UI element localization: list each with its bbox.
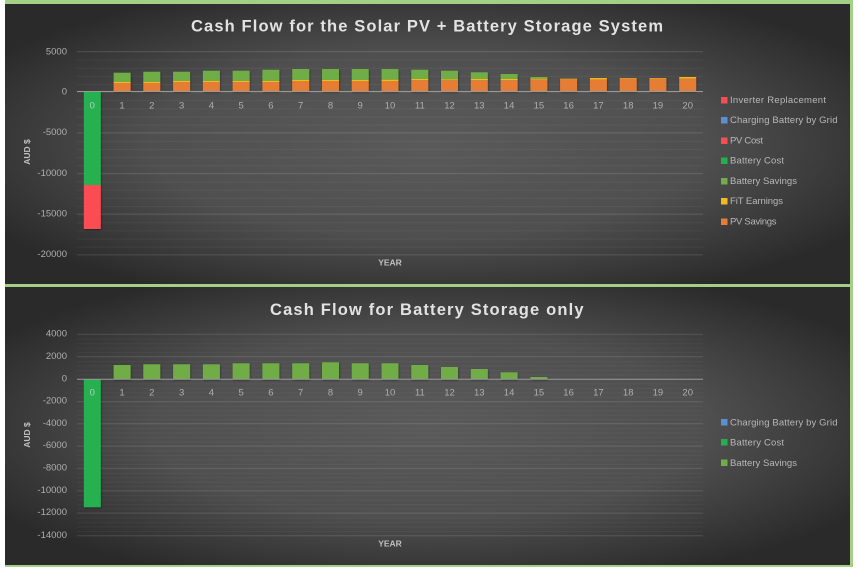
year 8 bar — [322, 69, 339, 92]
x axis labels: 18 — [623, 100, 633, 112]
title: battery storage only: Cash Flow for Battery Storage only — [270, 301, 584, 319]
year 14 bar — [501, 74, 518, 92]
x axis labels: 15 — [534, 388, 544, 398]
x axis labels: 19 — [653, 100, 663, 112]
x axis labels: 4 — [209, 100, 214, 112]
x axis labels: 7 — [298, 100, 303, 112]
year 8 bar — [322, 362, 339, 379]
x axis labels: 13 — [474, 100, 485, 112]
year 6 bar — [262, 70, 279, 92]
gridlines and y axis — [37, 328, 703, 541]
gridlines and y axis: 0 — [62, 86, 67, 98]
x axis title: YEAR — [378, 538, 402, 548]
year 5 bar — [233, 363, 250, 379]
gridlines and y axis: -5000 — [43, 127, 67, 138]
x axis labels: 5 — [238, 388, 244, 398]
panel: solar PV + battery cash flow — [5, 4, 850, 284]
x axis labels: 9 — [358, 100, 363, 112]
gridlines and y axis: -10000 — [37, 485, 67, 496]
battery bars — [84, 362, 547, 507]
year 9 bar — [352, 363, 369, 379]
x axis labels: 0 — [90, 388, 95, 398]
x axis labels: 12 — [444, 100, 455, 112]
x axis labels: 14 — [504, 388, 514, 398]
legend: solar PV + battery: FiT Earnings — [730, 196, 783, 207]
year 10 bar — [382, 69, 398, 92]
gridlines and y axis: -10000 — [37, 168, 67, 179]
legend: solar PV + battery: PV Savings — [730, 216, 777, 228]
year 13 bar — [471, 369, 488, 379]
legend: battery only: Battery Cost — [730, 438, 784, 448]
gridlines and y axis: -4000 — [43, 418, 67, 429]
x axis labels: 12 — [444, 388, 455, 398]
gridlines and y axis: -8000 — [43, 462, 67, 474]
year 19 bar — [649, 78, 666, 92]
year 14 bar — [501, 372, 518, 379]
year 5 bar — [233, 71, 250, 92]
x axis labels: 13 — [474, 388, 485, 398]
x axis labels: 8 — [328, 100, 333, 112]
x axis labels: 16 — [563, 388, 574, 398]
x axis labels: 16 — [563, 100, 574, 112]
x axis labels: 20 — [682, 100, 693, 112]
year 4 bar — [203, 71, 220, 92]
title: solar PV + battery: Cash Flow for the Solar PV + Battery Storage System — [191, 18, 663, 36]
x axis labels: 18 — [623, 388, 633, 398]
year 2 bar — [143, 364, 160, 379]
legend: battery only: Battery Savings — [730, 458, 797, 469]
x axis labels: 3 — [179, 388, 184, 398]
gridlines and y axis: 2000 — [46, 351, 67, 362]
year 3 bar — [173, 72, 190, 92]
year 1 bar — [114, 73, 131, 92]
legend: solar PV + battery: PV Cost — [730, 136, 763, 146]
year 11 bar — [411, 365, 428, 379]
x axis labels: 10 — [385, 388, 395, 398]
legend: battery only: Charging Battery by Grid — [730, 418, 838, 428]
x axis labels: 6 — [268, 100, 274, 112]
year 12 bar — [441, 367, 458, 379]
y axis title: AUD $ — [22, 422, 32, 448]
x axis labels — [90, 388, 693, 398]
year 13 bar — [471, 72, 488, 92]
x axis labels: 10 — [385, 100, 395, 112]
year 10 bar — [382, 363, 398, 379]
legend: solar PV + battery: Battery Cost — [730, 156, 784, 166]
x axis labels: 3 — [179, 100, 184, 112]
x axis labels: 15 — [534, 100, 544, 112]
legend: solar PV + battery: Battery Savings — [730, 176, 797, 187]
year 15 bar — [530, 377, 547, 379]
gridlines and y axis: -6000 — [43, 440, 67, 451]
x axis labels: 14 — [504, 100, 514, 112]
x axis labels: 20 — [682, 388, 693, 398]
x axis labels: 0 — [90, 100, 95, 112]
gridlines and y axis: -12000 — [37, 507, 67, 518]
legend: solar PV + battery: Charging Battery by Grid — [730, 115, 838, 126]
year 2 bar — [143, 72, 160, 92]
year 6 bar — [262, 363, 279, 379]
gridlines and y axis: 5000 — [46, 46, 67, 58]
year 3 bar — [173, 364, 190, 379]
gridlines and y axis: -15000 — [37, 208, 67, 220]
stacked bars — [84, 69, 696, 229]
x axis labels: 19 — [653, 388, 663, 398]
year 15 bar — [530, 77, 547, 92]
x axis labels: 1 — [119, 388, 125, 398]
x axis labels: 2 — [149, 100, 154, 112]
x axis labels: 9 — [358, 388, 363, 398]
year 0 bar — [84, 379, 101, 507]
legend: solar PV + battery: Inverter Replacement — [730, 95, 826, 106]
x axis title: YEAR — [378, 258, 402, 268]
year 16 bar — [560, 79, 577, 92]
gridlines and y axis: -2000 — [43, 396, 67, 406]
y axis title: AUD $ — [22, 139, 32, 165]
year 1 bar — [114, 365, 131, 379]
gridlines and y axis: -14000 — [37, 530, 67, 541]
x axis labels: 11 — [415, 388, 425, 398]
legend: solar PV + battery — [721, 95, 838, 228]
year 7 bar — [292, 69, 309, 92]
year 7 bar — [292, 363, 309, 379]
gridlines and y axis: -20000 — [37, 249, 67, 260]
year 17 bar — [590, 78, 607, 92]
x axis labels: 2 — [149, 388, 154, 398]
x axis labels: 17 — [593, 100, 604, 112]
x axis labels: 7 — [298, 388, 303, 398]
gridlines and y axis: 4000 — [46, 328, 67, 340]
x axis labels: 17 — [593, 388, 604, 398]
year 4 bar — [203, 364, 220, 379]
x axis labels: 11 — [415, 100, 425, 112]
year 18 bar — [620, 78, 637, 92]
x axis labels: 8 — [328, 388, 333, 398]
x axis labels: 6 — [268, 388, 274, 398]
year 11 bar — [411, 70, 428, 92]
year 0 bar — [84, 92, 101, 229]
x axis labels — [90, 100, 693, 112]
x axis labels: 1 — [119, 100, 125, 112]
legend: battery only — [721, 418, 838, 469]
gridlines and y axis: 0 — [62, 374, 67, 384]
year 12 bar — [441, 71, 458, 92]
gridlines and y axis — [37, 46, 703, 260]
panel: battery storage only cash flow — [5, 287, 850, 565]
year 9 bar — [352, 69, 369, 92]
year 20 bar — [679, 77, 696, 92]
x axis labels: 4 — [209, 388, 214, 398]
x axis labels: 5 — [238, 100, 244, 112]
